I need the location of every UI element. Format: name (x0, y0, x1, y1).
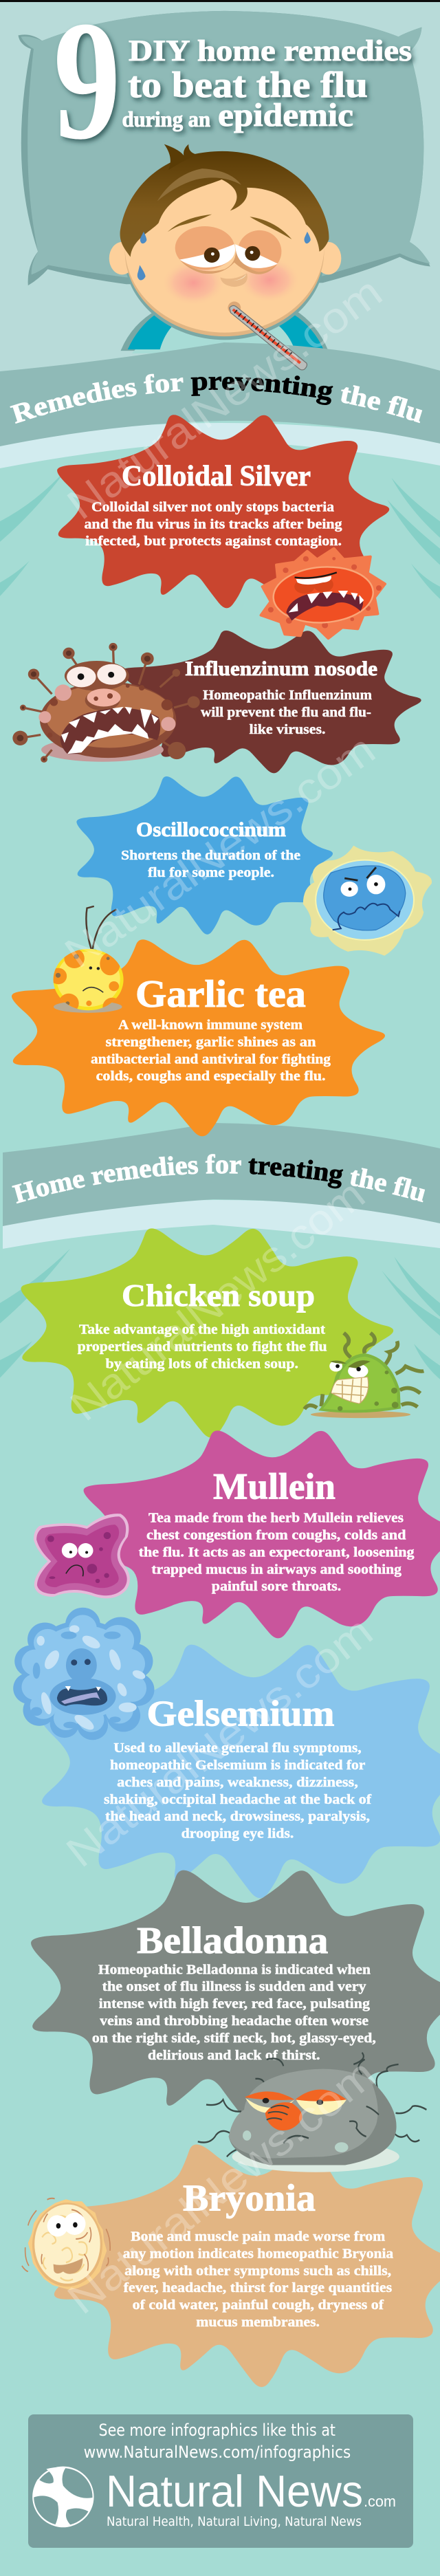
panel: mullein (34, 1430, 440, 1638)
heading: home remedies for treating the flu: Home remedies for treating the flu (12, 1154, 425, 1203)
heading: remedies for preventing the flu: Remedies for preventing the flu (10, 374, 422, 424)
panel: belladonna (31, 1870, 440, 2172)
title: epidemic (218, 97, 353, 133)
text: mullein body: Tea made from the herb Mullein relieves (148, 1511, 404, 1526)
text: mullein body: trapped mucus in airways and soothing (151, 1562, 402, 1577)
text: colloidal silver body: and the flu virus in its tracks after being (84, 517, 342, 532)
heading: mullein: Mullein (213, 1466, 336, 1507)
decorative rays upper (0, 468, 440, 599)
title: DIY home remedies (129, 35, 412, 67)
text: influenzinum body: like viruses. (249, 723, 326, 737)
watermark text (56, 268, 390, 2324)
watermark text: NaturalNews.com (56, 725, 384, 977)
icon: grey virus (198, 2053, 426, 2172)
text: bryonia body: fever, headache, thirst for large quantities (124, 2281, 393, 2295)
panel: colloidal silver (57, 415, 389, 638)
text: influenzinum body: will prevent the flu and flu- (201, 706, 371, 720)
panel: gelsemium (13, 1608, 440, 1898)
text: gelsemium body: shaking, occipital headache at the back of (104, 1793, 372, 1807)
text: gelsemium body: drooping eye lids. (182, 1827, 294, 1842)
icon: thermometer (228, 302, 307, 370)
blob: bryonia (53, 2145, 440, 2387)
logo wordmark: Natural Health, Natural Living, Natural News (107, 2514, 362, 2529)
blob: gelsemium (41, 1645, 440, 1898)
text: mullein body: chest congestion from coughs, colds and (146, 1528, 406, 1543)
text: belladonna body: intense with high fever, red face, pulsating (99, 1997, 370, 2011)
panel: footer (28, 2414, 413, 2548)
watermark text: NaturalNews.com (58, 1608, 382, 1877)
heading: belladonna: Belladonna (137, 1919, 328, 1961)
blob: garlic tea (12, 939, 385, 1136)
text: garlic tea body: A well-known immune system (118, 1018, 302, 1033)
text: chicken soup body: Take advantage of the high antioxidant (79, 1323, 326, 1338)
text: garlic tea body: strengthener, garlic shines as an (106, 1036, 316, 1049)
text: belladonna body: on the right side, stiff neck, hot, glassy-eyed, (92, 2031, 376, 2046)
text: garlic tea body: antibacterial and antiviral for fighting (91, 1052, 331, 1067)
text: belladonna body (92, 1963, 376, 2063)
blob: colloidal silver (57, 415, 389, 608)
watermark text: NaturalNews.com (62, 1170, 374, 1430)
text: belladonna body: the onset of flu illness is sudden and very (102, 1980, 366, 1994)
blob: influenzinum (120, 631, 421, 773)
panel: garlic tea (12, 906, 385, 1136)
text: belladonna body: Homeopathic Belladonna is indicated when (98, 1963, 371, 1977)
text: belladonna body: delirious and lack of thirst. (148, 2049, 320, 2063)
icon: globe logo (33, 2467, 94, 2527)
text: belladonna body: veins and throbbing headache often worse (100, 2014, 368, 2029)
watermark text: NaturalNews.com (59, 2050, 384, 2324)
panel: oscillococcinum (76, 776, 432, 956)
watermark text: NaturalNews.com (59, 268, 390, 529)
heading: influenzinum nosode: Influenzinum nosode (185, 657, 377, 680)
logo wordmark: .com (364, 2493, 396, 2510)
title (54, 0, 412, 175)
text: colloidal silver body: infected, but protects against contagion. (85, 534, 342, 549)
decorative rays lower (0, 1249, 440, 1379)
heading: colloidal silver: Colloidal Silver (122, 461, 311, 492)
icon: brown virus (12, 643, 200, 763)
text: influenzinum body: Homeopathic Influenzinum (203, 688, 372, 703)
text: chicken soup body (78, 1323, 327, 1371)
heading: garlic tea: Garlic tea (135, 973, 306, 1016)
heading: oscillococcinum: Oscillococcinum (136, 818, 286, 841)
icon: blue virus (303, 846, 432, 956)
text: bryonia body: any motion indicates homeopathic Bryonia (123, 2247, 393, 2261)
title: during an (122, 107, 210, 131)
text: bryonia body: along with other symptoms such as chills, (124, 2264, 391, 2278)
icon: magenta virus (34, 1514, 130, 1598)
text: chicken soup body: by eating lots of chicken soup. (106, 1357, 298, 1371)
blob: oscillococcinum (76, 776, 333, 935)
text: oscillococcinum body: flu for some people. (148, 866, 274, 880)
text: see more infographics (84, 2421, 351, 2462)
heading: bryonia: Bryonia (183, 2177, 316, 2218)
text: see more infographics: www.NaturalNews.com/infographics (84, 2443, 351, 2462)
blob: chicken soup (21, 1228, 393, 1438)
text: chicken soup body: properties and nutrients to fight the flu (78, 1340, 327, 1355)
text: mullein body: painful sore throats. (212, 1580, 341, 1594)
text: gelsemium body: the head and neck, drowsiness, paralysis, (105, 1810, 370, 1824)
heading: chicken soup: Chicken soup (122, 1278, 315, 1313)
icon: yellow virus (50, 906, 124, 1016)
text: see more infographics: See more infographics like this at (99, 2421, 336, 2440)
text: oscillococcinum body (121, 849, 300, 880)
text: bryonia body: of cold water, painful cough, dryness of (133, 2298, 384, 2313)
logo wordmark: Natural News (106, 2466, 363, 2516)
text: gelsemium body: aches and pains, weakness, dizziness, (117, 1776, 358, 1790)
text: colloidal silver body: Colloidal silver not only stops bacteria (91, 501, 334, 514)
panel: bryonia (22, 2145, 440, 2387)
text: mullein body: the flu. It acts as an expectorant, loosening (139, 1545, 415, 1560)
text: gelsemium body: homeopathic Gelsemium is indicated for (110, 1758, 366, 1773)
text: garlic tea body (91, 1018, 331, 1084)
text: oscillococcinum body: Shortens the duration of the (121, 849, 300, 863)
text: mullein body (139, 1511, 415, 1594)
text: garlic tea body: colds, coughs and especially the flu. (96, 1069, 326, 1084)
text: bryonia body: mucus membranes. (196, 2315, 320, 2330)
text: gelsemium body (104, 1741, 372, 1842)
icon: cream virus (22, 2198, 110, 2289)
title: to beat the flu (128, 65, 368, 105)
blob: belladonna (31, 1870, 440, 2123)
section band: treating (3, 1123, 440, 1249)
panel: influenzinum nosode (12, 631, 421, 773)
text: gelsemium body: Used to alleviate general flu symptoms, (113, 1741, 362, 1756)
icon: fluffy blue virus (13, 1608, 154, 1740)
sick boy illustration (109, 144, 341, 353)
text: colloidal silver body (84, 501, 342, 549)
panel: chicken soup (21, 1228, 424, 1438)
icon: orange virus (261, 549, 385, 638)
text: influenzinum body (201, 688, 372, 737)
blob: mullein (84, 1430, 440, 1638)
heading: gelsemium: Gelsemium (147, 1694, 334, 1734)
text: bryonia body: Bone and muscle pain made worse from (131, 2229, 385, 2245)
text: bryonia body (123, 2229, 393, 2330)
section band: preventing (0, 342, 440, 468)
pillow (19, 11, 430, 285)
icon: green virus (305, 1333, 424, 1418)
